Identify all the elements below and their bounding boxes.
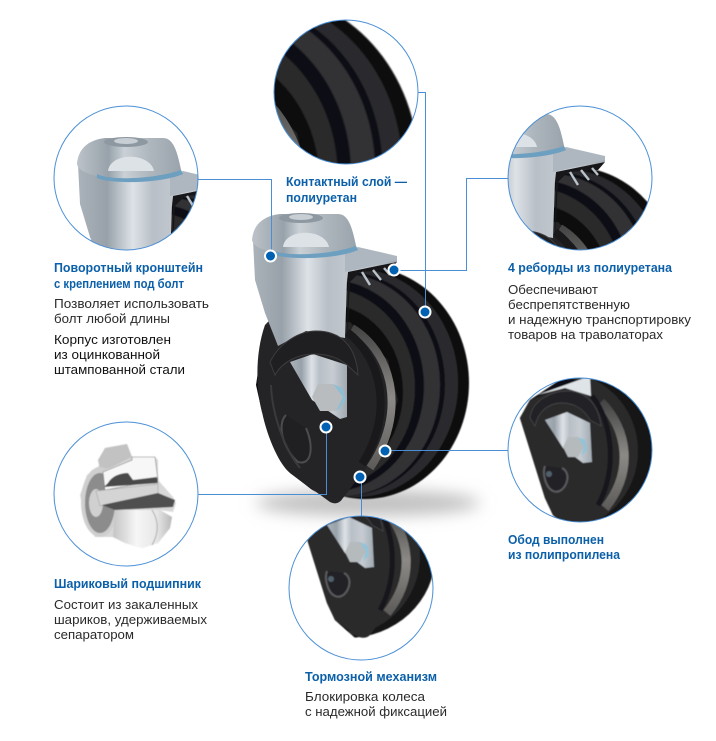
panel: ball bearing cutaway — [54, 422, 198, 566]
text block: ribs: Обеспечивают — [508, 282, 598, 297]
panel: rim close-up — [508, 378, 652, 522]
marker: rim — [380, 446, 390, 456]
leader: bracket — [198, 180, 272, 256]
leader: contact layer — [418, 92, 426, 312]
tread ribs seen through bracket — [362, 268, 390, 285]
text block: contact layer: полиуретан — [286, 191, 357, 205]
brake arch — [270, 331, 358, 375]
panel: swivel bracket close-up — [54, 106, 198, 250]
leader: rim — [385, 450, 508, 452]
text block: bracket: болт любой длины — [54, 311, 170, 326]
panel: contact layer close-up — [274, 20, 418, 164]
text block: bracket: штампованной стали — [54, 362, 185, 377]
leader: brake — [360, 477, 362, 516]
text block: rim: Обод выполнен — [508, 533, 604, 547]
text block: brake — [305, 670, 447, 719]
text block: ribs: беспрепятственную — [508, 297, 630, 312]
text block: ribs: и надежную транспортировку — [508, 312, 692, 327]
marker: bearing — [320, 422, 332, 432]
panel: brake close-up — [288, 516, 434, 660]
text block: bearing: шариков, удерживаемых — [54, 612, 208, 627]
text block: contact layer — [286, 175, 407, 205]
swivel bracket — [253, 240, 397, 346]
text block: ribs — [508, 261, 692, 342]
fastening bolt — [312, 384, 346, 411]
text block: bracket: Поворотный кронштейн — [54, 261, 203, 275]
hub sheen — [282, 415, 311, 463]
rim highlight — [352, 328, 392, 468]
text block: bracket: из оцинкованной — [54, 347, 160, 362]
leader: bearing — [198, 427, 326, 494]
text block: bracket: Корпус изготовлен — [54, 332, 171, 347]
floor shadow — [256, 490, 480, 516]
text block: rim — [508, 533, 621, 562]
marker: ribs — [388, 264, 400, 276]
text block: bracket — [54, 261, 209, 377]
leader: ribs — [394, 178, 508, 270]
text block: brake: Блокировка колеса — [305, 689, 426, 704]
text block: brake: с надежной фиксацией — [305, 704, 447, 719]
text block: bearing — [54, 577, 208, 642]
panel: four ribs close-up — [508, 106, 652, 250]
marker: contact layer — [420, 306, 430, 318]
text block: bearing: сепаратором — [54, 627, 134, 642]
text block: contact layer: Контактный слой — — [286, 175, 407, 189]
polyurethane tread with ribs — [236, 267, 469, 499]
text block: bearing: Шариковый подшипник — [54, 577, 202, 591]
text block: bracket: с креплением под болт — [54, 277, 184, 291]
text block: bracket: Позволяет использовать — [54, 296, 209, 311]
marker: bracket — [265, 250, 276, 262]
text block: ribs: 4 реборды из полиуретана — [508, 261, 673, 275]
bolt-on mounting dome — [252, 214, 357, 254]
text block: rim: из полипропилена — [508, 548, 621, 562]
marker: brake — [354, 472, 366, 482]
text block: brake: Тормозной механизм — [305, 670, 437, 684]
bracket leg through brake window — [290, 354, 347, 419]
polypropylene rim and hub — [257, 322, 398, 503]
wheel caster main photo — [236, 213, 480, 516]
text block: ribs: товаров на траволаторах — [508, 327, 663, 342]
text block: bearing: Состоит из закаленных — [54, 597, 199, 612]
